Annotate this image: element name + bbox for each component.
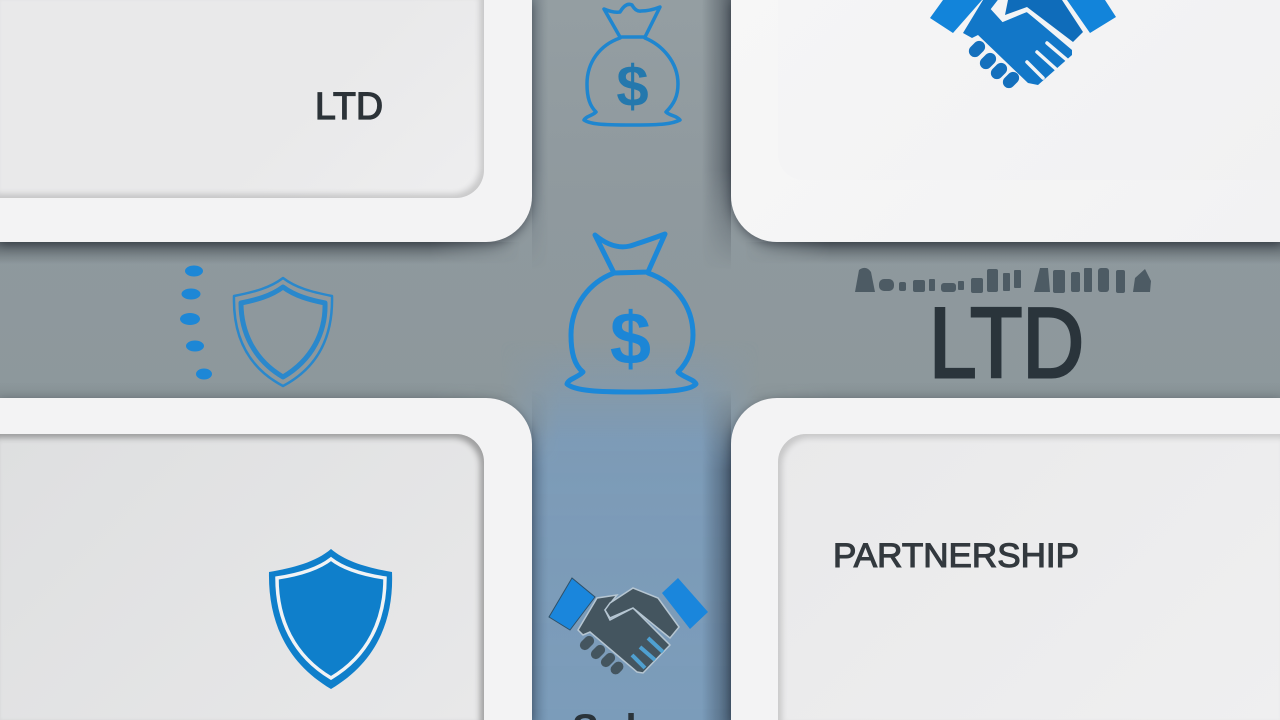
central column shading <box>532 0 731 720</box>
bottom-left inner panel <box>0 434 484 720</box>
icon: bottom handshake <box>549 578 708 676</box>
icon: outline shield <box>234 278 332 386</box>
top-right inner panel <box>778 0 1280 180</box>
bottom-right inner panel <box>778 434 1280 720</box>
panel: top-right partnership <box>731 0 1280 242</box>
top-left inner panel <box>0 0 484 198</box>
icon: centre money bag <box>567 234 696 392</box>
icon: top money bag <box>584 4 680 125</box>
horizontal band shading <box>0 242 1280 398</box>
icon: top-right handshake <box>930 0 1116 91</box>
icon: top dollar sign: $ <box>616 54 649 119</box>
heading: LTD top-left: LTD <box>315 86 383 128</box>
heading: large LTD: LTD <box>929 287 1084 398</box>
central column blue tint <box>525 370 735 720</box>
heading: PARTNERSHIP: PARTNERSHIP <box>833 537 1079 575</box>
icon: centre dollar sign: $ <box>610 297 651 380</box>
panel: top-left LTD <box>0 0 532 242</box>
panel: bottom-right PARTNERSHIP <box>731 398 1280 720</box>
icon: row of dots <box>180 266 212 380</box>
icon: solid shield <box>269 549 392 689</box>
panel: bottom-left shield <box>0 398 532 720</box>
smudged illegible caption <box>855 268 1151 293</box>
